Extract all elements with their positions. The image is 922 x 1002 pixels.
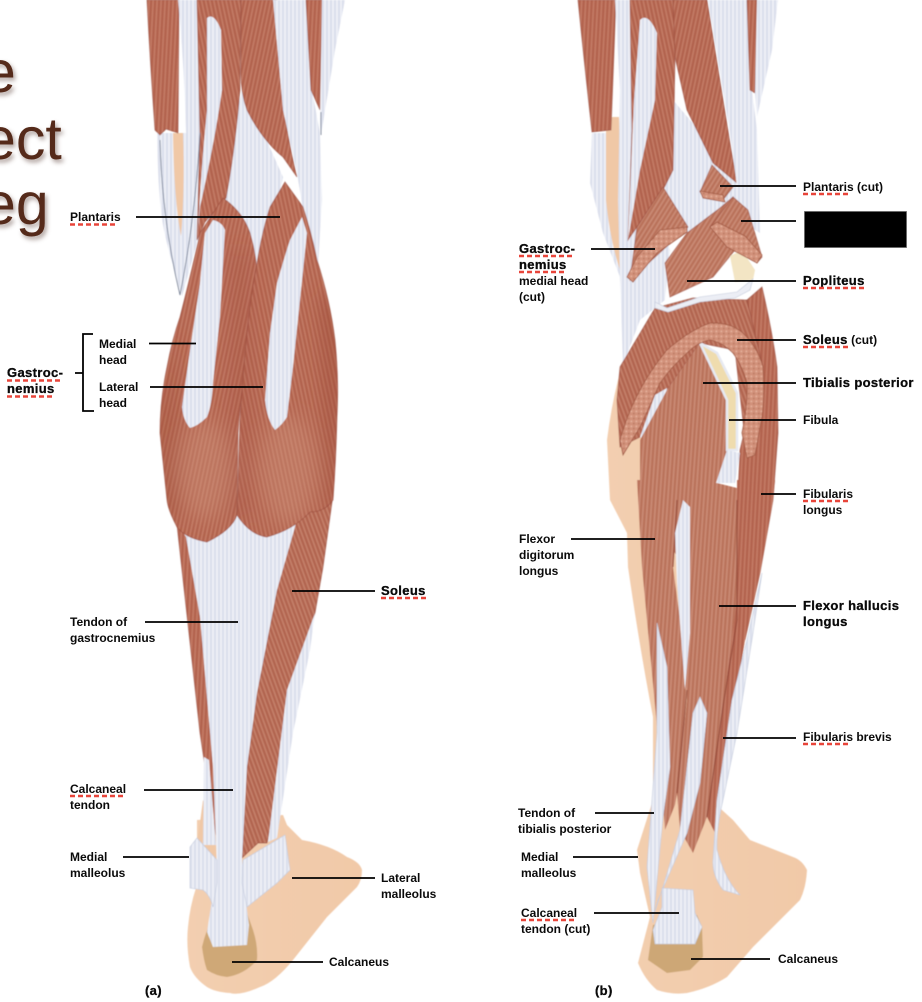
gastrocnemius medial stump bbox=[630, 187, 688, 280]
label: Tendon of gastrocnemius bbox=[70, 615, 156, 645]
label: Calcaneal tendon bbox=[70, 782, 126, 812]
label: Flexor digitorum longus: Flexor bbox=[519, 532, 555, 546]
label: Lateral malleolus bbox=[381, 871, 437, 901]
label: Fibularis longus: Fibularis bbox=[803, 487, 853, 501]
tibialis posterior and flexor hallucis longus bbox=[640, 343, 745, 853]
calcaneal tendon cut bbox=[653, 888, 702, 944]
label: Gastrocnemius a: Gastroc- bbox=[7, 365, 63, 380]
title fragments bbox=[0, 39, 62, 237]
plantaris stump bbox=[700, 165, 733, 200]
medial hamstring b bbox=[628, 0, 676, 240]
medial hamstring muscle a bbox=[197, 0, 241, 240]
medial muscle strip a bbox=[177, 525, 216, 835]
flexor digitorum longus and upper tibialis underlay bbox=[637, 480, 687, 830]
label: Calcaneal tendon (cut) bbox=[521, 906, 590, 936]
ankle skin left a bbox=[197, 800, 216, 860]
popliteus bbox=[665, 197, 735, 297]
label: Medial head: Medial bbox=[99, 337, 136, 351]
fibularis tendons bbox=[713, 573, 762, 895]
skin: leg and foot b bbox=[607, 365, 807, 994]
label: Flexor digitorum longus: digitorum bbox=[519, 548, 574, 562]
soleus cut face bbox=[620, 323, 764, 458]
flexor hallucis tendon bbox=[653, 697, 707, 917]
gastrocnemius medial cut face bbox=[627, 227, 687, 282]
label: Calcaneal tendon (cut): Calcaneal bbox=[521, 906, 577, 920]
leader lines a bbox=[123, 217, 375, 962]
label: Fibularis brevis: Fibularis brevis bbox=[803, 730, 892, 744]
label: Flexor hallucis longus: longus bbox=[803, 614, 848, 629]
semimembranosus tendon a bbox=[198, 16, 222, 235]
label: Medial malleolus b bbox=[521, 850, 577, 880]
far right tendon a bbox=[320, 0, 345, 135]
label: Tendon of tibialis posterior: Tendon of bbox=[518, 806, 576, 820]
label: Lateral malleolus: malleolus bbox=[381, 887, 437, 901]
fibularis longus b bbox=[735, 287, 778, 640]
label: Lateral malleolus: Lateral bbox=[381, 871, 420, 885]
skin sliver upper b bbox=[606, 117, 620, 270]
label: Calcaneus b: Calcaneus bbox=[778, 952, 838, 966]
label: Medial malleolus a: malleolus bbox=[70, 866, 126, 880]
label: Lateral head: Lateral bbox=[99, 380, 138, 394]
fascia below knee b bbox=[590, 133, 670, 365]
label: Tendon of gastrocnemius: gastrocnemius bbox=[70, 631, 156, 645]
label: Gastrocnemius medial head (cut): (cut) bbox=[519, 290, 545, 304]
label: Fibula: Fibula bbox=[803, 413, 839, 427]
gastrocnemius lateral stump bbox=[710, 197, 762, 263]
label: Tendon of tibialis posterior: tibialis posterior bbox=[518, 822, 612, 836]
label: Soleus (cut): Soleus (cut) bbox=[803, 332, 877, 347]
label: Medial head: head bbox=[99, 353, 127, 367]
gastrocnemius bracket a bbox=[75, 334, 94, 411]
label: (b): (b) bbox=[595, 983, 613, 998]
label: Gastrocnemius a: nemius bbox=[7, 381, 55, 396]
plantaris cut face bbox=[700, 191, 725, 202]
gastrocnemius medial tendon stripe bbox=[182, 220, 225, 428]
biceps b bbox=[673, 0, 737, 183]
label: Flexor digitorum longus bbox=[519, 532, 574, 578]
white tendon left b bbox=[615, 0, 632, 282]
gastrocnemius shading bbox=[155, 250, 340, 525]
panel: leg (a) illustration bbox=[147, 0, 362, 994]
retinaculum right a bbox=[242, 835, 290, 907]
far right muscle a bbox=[306, 0, 322, 110]
gastrocnemius lateral tendon stripe bbox=[265, 217, 307, 430]
upper white band a bbox=[178, 0, 200, 296]
popliteal fascia b bbox=[660, 100, 745, 240]
label: Medial malleolus a bbox=[70, 850, 126, 880]
label: Tibialis posterior: Tibialis posterior bbox=[803, 375, 914, 390]
semimembranosus tendon b bbox=[628, 18, 657, 240]
label: Lateral head: head bbox=[99, 396, 127, 410]
dark tendon lines a bbox=[160, 112, 321, 295]
fibula lower tendon bbox=[716, 450, 740, 483]
white gap under crescent bbox=[640, 388, 667, 440]
label: Gastrocnemius medial head (cut) bbox=[519, 241, 588, 304]
soleus a bbox=[242, 495, 333, 858]
label: Lateral head bbox=[99, 380, 138, 410]
left hamstring b bbox=[578, 0, 616, 132]
label: Flexor hallucis longus bbox=[803, 598, 899, 629]
label: Fibularis longus bbox=[803, 487, 853, 517]
medial small tendons a bbox=[203, 757, 216, 845]
gastrocnemius lateral head bbox=[237, 182, 338, 537]
label: Calcaneal tendon: Calcaneal bbox=[70, 782, 126, 796]
redaction box bbox=[804, 212, 906, 248]
fibularis lower b bbox=[707, 480, 775, 837]
leader lines b bbox=[571, 186, 796, 959]
label: Calcaneus a: Calcaneus bbox=[329, 955, 389, 969]
panel: leg (b) illustration bbox=[578, 0, 807, 994]
gastrocnemius medial head bbox=[160, 198, 257, 542]
fibula bbox=[700, 343, 737, 450]
lateral tendon a bbox=[268, 613, 315, 842]
popliteal fascia a bbox=[205, 87, 283, 285]
label: Tendon of gastrocnemius: Tendon of bbox=[70, 615, 128, 629]
calcaneus a bbox=[202, 913, 257, 977]
label: Flexor hallucis longus: Flexor hallucis bbox=[803, 598, 899, 613]
label: Medial malleolus a: Medial bbox=[70, 850, 107, 864]
label: Medial malleolus b: malleolus bbox=[521, 866, 577, 880]
skin: foot a bbox=[187, 815, 362, 994]
label: Calcaneal tendon (cut): tendon (cut) bbox=[521, 922, 590, 936]
biceps femoris muscle a bbox=[241, 0, 297, 177]
white tendon strip centre top bbox=[675, 500, 690, 690]
label: Medial malleolus b: Medial bbox=[521, 850, 558, 864]
label: Calcaneal tendon: tendon bbox=[70, 798, 110, 812]
label: Gastrocnemius a bbox=[7, 365, 63, 396]
label: Tendon of tibialis posterior bbox=[518, 806, 612, 836]
calcaneal tendon and tendon of gastrocnemius bbox=[177, 505, 297, 947]
calcaneus b bbox=[648, 915, 703, 973]
popliteus tendon b bbox=[655, 279, 753, 312]
label: Popliteus: Popliteus bbox=[803, 273, 865, 288]
label: Medial head bbox=[99, 337, 136, 367]
label: Fibularis longus: longus bbox=[803, 503, 843, 517]
far right tendon b bbox=[755, 0, 778, 117]
label: (a): (a) bbox=[145, 983, 162, 998]
label: Gastrocnemius medial head (cut): Gastroc- bbox=[519, 241, 575, 256]
far right b bbox=[747, 0, 757, 93]
muscle divisions b bbox=[673, 500, 737, 817]
retinaculum left a bbox=[190, 838, 217, 907]
label: Plantaris (cut): Plantaris (cut) bbox=[803, 180, 883, 194]
lateral tendon b bbox=[708, 0, 760, 233]
tendon of tibialis posterior bbox=[647, 623, 670, 923]
label: Gastrocnemius medial head (cut): medial head bbox=[519, 274, 588, 288]
skin sliver upper a bbox=[173, 133, 184, 236]
gastrocnemius lateral cut face bbox=[710, 222, 762, 263]
soleus muscle b bbox=[617, 298, 763, 457]
label: Gastrocnemius medial head (cut): nemius bbox=[519, 257, 567, 272]
label: Plantaris: Plantaris bbox=[70, 210, 121, 224]
lateral hamstring tendon a bbox=[273, 0, 322, 267]
cream knee cap b bbox=[730, 250, 755, 282]
medial white underlay a bbox=[157, 133, 205, 296]
label: Flexor digitorum longus: longus bbox=[519, 564, 559, 578]
upper left hamstring a bbox=[147, 0, 179, 135]
label: Soleus a: Soleus bbox=[381, 583, 426, 598]
